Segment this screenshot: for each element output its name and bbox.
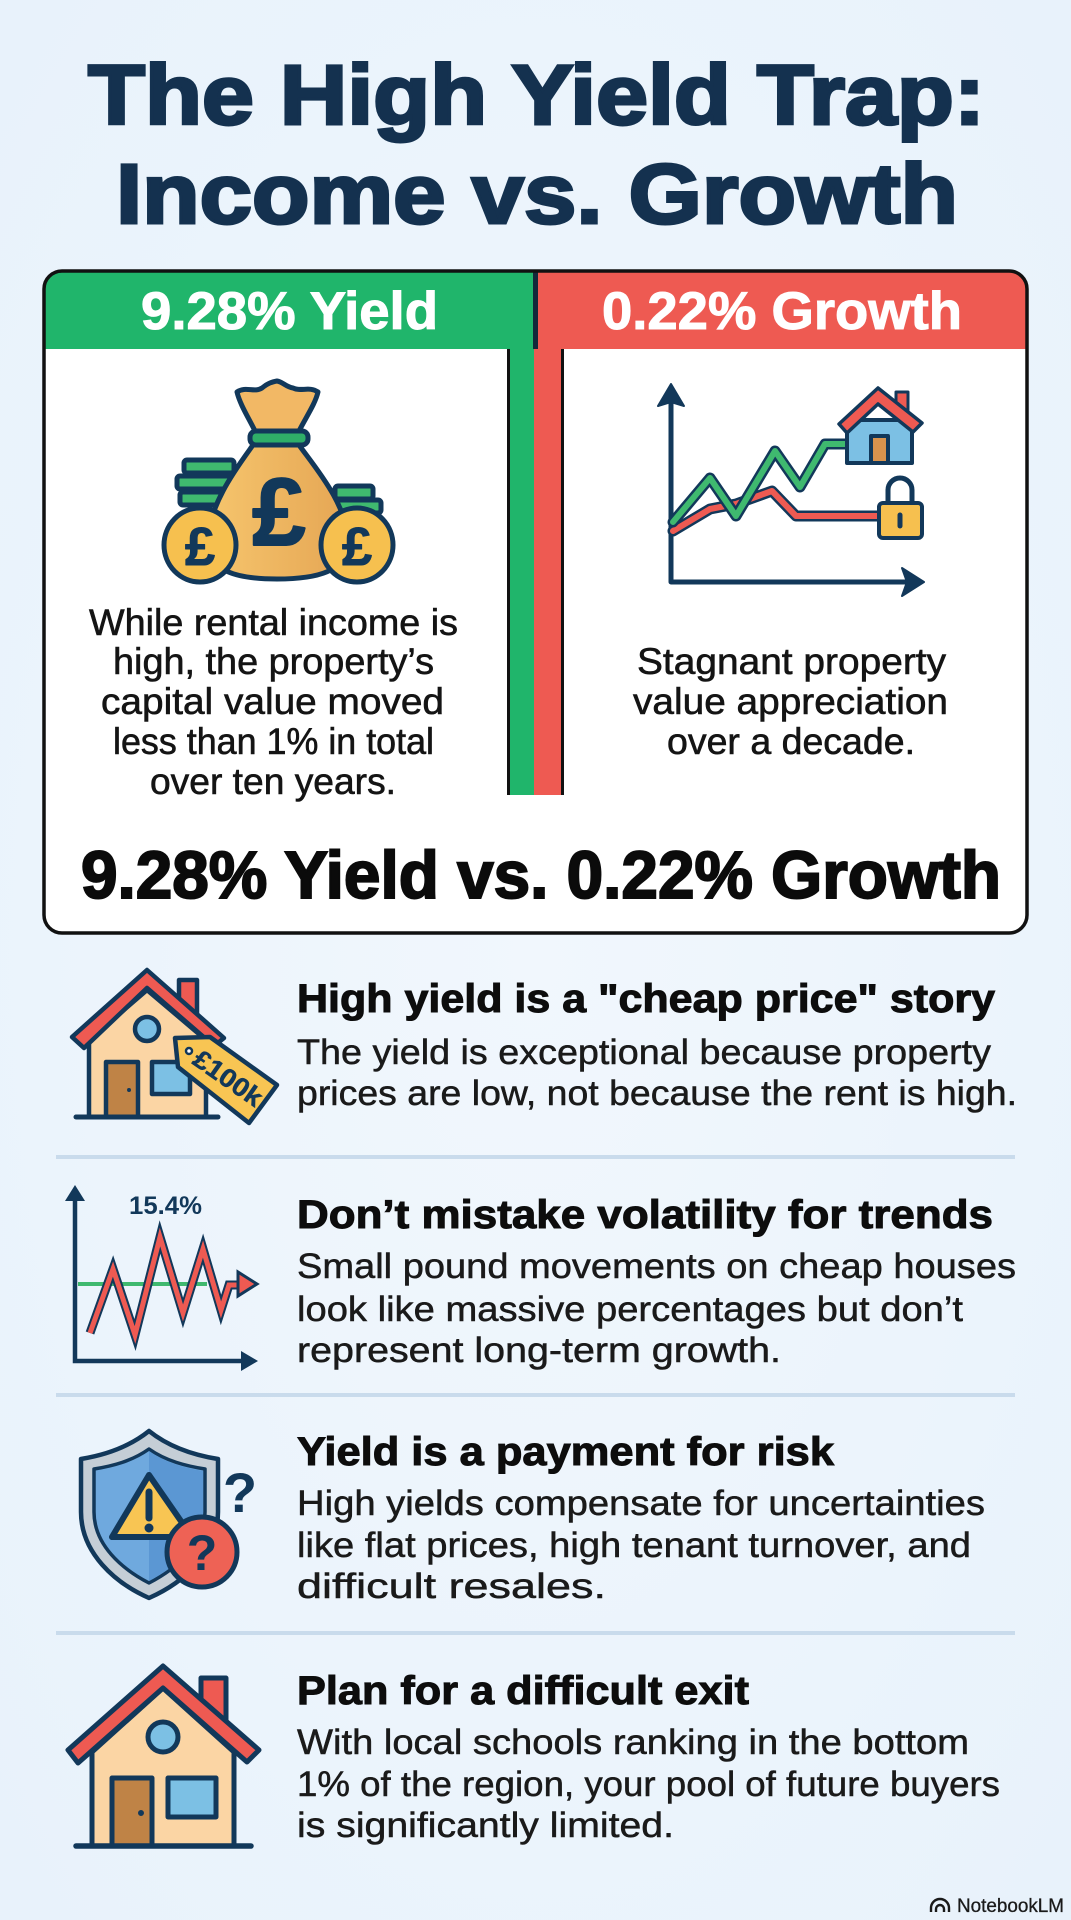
icon: money bag with pound coins xyxy=(164,381,393,582)
item: payment for risk xyxy=(81,1430,985,1606)
text: growth explanation: Stagnant property xyxy=(637,641,947,682)
header: growth: 0.22% Growth xyxy=(602,282,962,341)
body text: The yield is exceptional because property xyxy=(297,1033,992,1072)
title: Income vs. Growth xyxy=(116,147,958,241)
icon: shield with warning: ? xyxy=(187,1525,217,1581)
icon: money bag with pound coins: £ xyxy=(342,517,372,577)
panel outline xyxy=(44,271,1027,933)
icon: shield with warning xyxy=(81,1431,257,1598)
text: yield explanation: less than 1% in total xyxy=(113,721,434,762)
heading: Plan for a difficult exit xyxy=(297,1669,749,1713)
icon: house with price tag xyxy=(72,970,277,1123)
header: yield xyxy=(44,271,533,349)
body text: prices are low, not because the rent is high. xyxy=(297,1074,1017,1113)
icon: money bag with pound coins: £ xyxy=(185,517,215,577)
header: growth xyxy=(538,271,1027,349)
body text: With local schools ranking in the bottom xyxy=(297,1723,969,1762)
text: yield explanation: capital value moved xyxy=(101,681,444,722)
body text: is significantly limited. xyxy=(297,1806,674,1845)
body text: 1% of the region, your pool of future buyers xyxy=(297,1765,1000,1804)
heading: Don’t mistake volatility for trends xyxy=(297,1193,993,1237)
body text xyxy=(297,1247,1016,1370)
header: yield: 9.28% Yield xyxy=(141,282,438,341)
icon: shield with warning: ? xyxy=(223,1461,257,1524)
item: difficult exit xyxy=(68,1666,1000,1846)
heading: Yield is a payment for risk xyxy=(297,1430,835,1474)
item: volatility xyxy=(65,1185,1016,1371)
icon: house with price tag: £100k xyxy=(188,1043,269,1113)
text: yield explanation: high, the property’s xyxy=(113,641,434,682)
text: yield explanation: While rental income is xyxy=(89,602,458,643)
text: growth explanation: value appreciation xyxy=(633,681,948,722)
text: yield explanation xyxy=(89,602,458,802)
body text: represent long-term growth. xyxy=(297,1331,781,1370)
icon: money bag with pound coins: £ xyxy=(252,459,306,566)
body text: look like massive percentages but don’t xyxy=(297,1290,963,1329)
body text xyxy=(297,1033,1017,1113)
title xyxy=(88,48,985,241)
text: growth explanation xyxy=(633,641,948,762)
centre divider bars xyxy=(507,271,564,795)
comparison statement: 9.28% Yield vs. 0.22% Growth xyxy=(81,838,1001,913)
body text: difficult resales. xyxy=(297,1567,606,1606)
body text xyxy=(297,1484,985,1606)
icon: house xyxy=(68,1666,259,1846)
text: yield explanation: over ten years. xyxy=(150,761,396,802)
footer: NotebookLM logo: NotebookLM xyxy=(957,1896,1064,1917)
text: growth explanation: over a decade. xyxy=(667,721,915,762)
heading: High yield is a "cheap price" story xyxy=(297,977,996,1021)
item: cheap price story xyxy=(72,970,1017,1123)
body text: Small pound movements on cheap houses xyxy=(297,1247,1016,1286)
body text: like flat prices, high tenant turnover, and xyxy=(297,1526,971,1565)
title: The High Yield Trap: xyxy=(88,48,985,142)
icon: growth chart with house and padlock xyxy=(658,384,924,596)
body text xyxy=(297,1723,1000,1845)
icon: volatile line chart xyxy=(65,1185,258,1371)
body text: High yields compensate for uncertainties xyxy=(297,1484,985,1523)
icon: volatile line chart: 15.4% xyxy=(129,1192,202,1220)
panel: yield vs growth comparison xyxy=(44,271,1027,933)
